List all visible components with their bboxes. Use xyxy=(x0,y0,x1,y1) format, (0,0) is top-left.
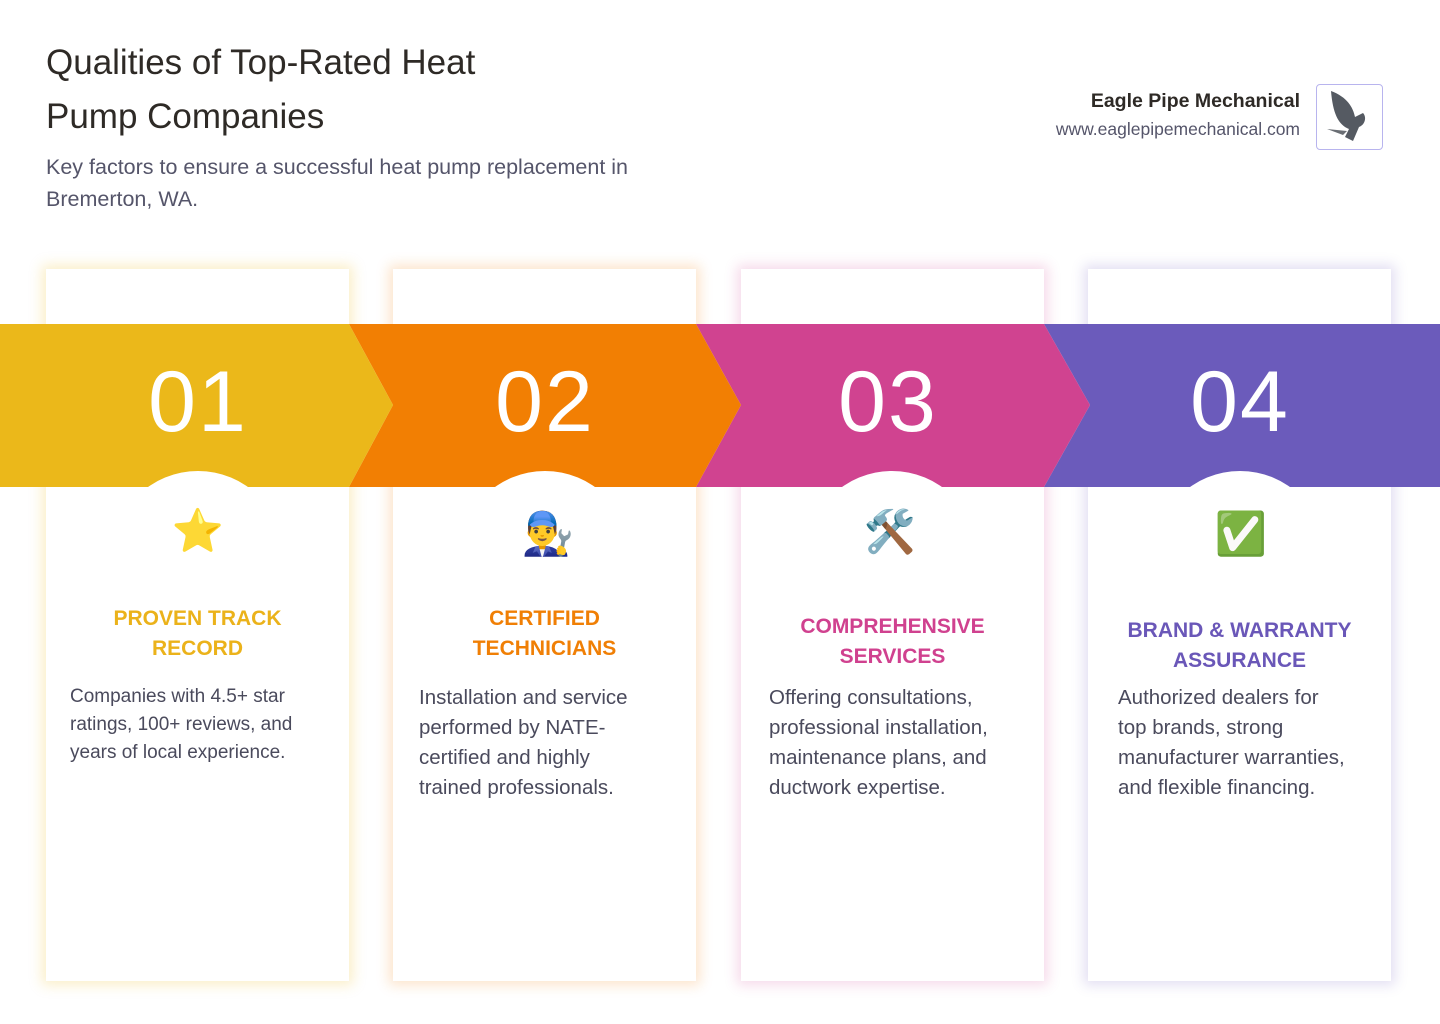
text 4: and flexible financing. xyxy=(1118,776,1315,799)
number 02: 02 xyxy=(495,354,595,450)
text 2: performed by NATE- xyxy=(419,716,605,739)
heading 4 xyxy=(1128,619,1352,672)
title: Qualities of Top-Rated Heat Pump Companies xyxy=(46,43,475,136)
icon: star: ⭐ xyxy=(172,507,224,556)
text 3 xyxy=(769,686,988,799)
heading 3: COMPREHENSIVE xyxy=(800,615,985,638)
heading 1: PROVEN TRACK xyxy=(113,607,282,630)
text 1: years of local experience. xyxy=(70,742,285,763)
card 3 xyxy=(741,269,1044,981)
text 3: ductwork expertise. xyxy=(769,776,946,799)
heading 2 xyxy=(472,607,616,660)
heading 2: CERTIFIED xyxy=(489,607,600,630)
heading 4: ASSURANCE xyxy=(1173,649,1306,672)
text 3: maintenance plans, and xyxy=(769,746,987,769)
text 3: professional installation, xyxy=(769,716,988,739)
heading 3 xyxy=(800,615,985,668)
text 4 xyxy=(1118,686,1345,799)
heading 2: TECHNICIANS xyxy=(473,637,616,660)
card 1 xyxy=(46,269,349,981)
text 2 xyxy=(419,686,628,799)
icon: check: ✅ xyxy=(1215,510,1267,559)
text 1 xyxy=(70,686,292,763)
text 1: ratings, 100+ reviews, and xyxy=(70,714,292,735)
text 4: top brands, strong xyxy=(1118,716,1283,739)
heading 3: SERVICES xyxy=(840,645,945,668)
brand block xyxy=(1056,84,1383,150)
text 2: certified and highly xyxy=(419,746,590,769)
arrow 4 xyxy=(1044,324,1440,487)
text 2: trained professionals. xyxy=(419,776,614,799)
brand url: www.eaglepipemechanical.com xyxy=(1056,119,1300,139)
arrow band xyxy=(0,324,1440,487)
text 3: Offering consultations, xyxy=(769,686,973,709)
brand name: Eagle Pipe Mechanical xyxy=(1091,90,1300,112)
number 04: 04 xyxy=(1190,354,1290,450)
text 4: Authorized dealers for xyxy=(1118,686,1319,709)
text 1: Companies with 4.5+ star xyxy=(70,686,285,707)
arrow 2 xyxy=(349,324,741,487)
card 2 xyxy=(393,269,696,981)
heading 4: BRAND & WARRANTY xyxy=(1128,619,1352,642)
icon: tools: 🛠️ xyxy=(864,508,916,557)
text 4: manufacturer warranties, xyxy=(1118,746,1345,769)
icon: technician: 👨‍🔧 xyxy=(522,510,574,559)
subtitle: Key factors to ensure a successful heat pump replacement in Bremerton, WA. xyxy=(46,155,628,211)
number 01: 01 xyxy=(148,354,248,450)
arrow 3 xyxy=(696,324,1090,487)
number 03: 03 xyxy=(838,354,938,450)
heading 1 xyxy=(113,607,282,660)
heading 1: RECORD xyxy=(152,637,243,660)
card 4 xyxy=(1088,269,1391,981)
text 2: Installation and service xyxy=(419,686,628,709)
logo xyxy=(1316,84,1383,150)
arrow 1 xyxy=(0,324,393,487)
